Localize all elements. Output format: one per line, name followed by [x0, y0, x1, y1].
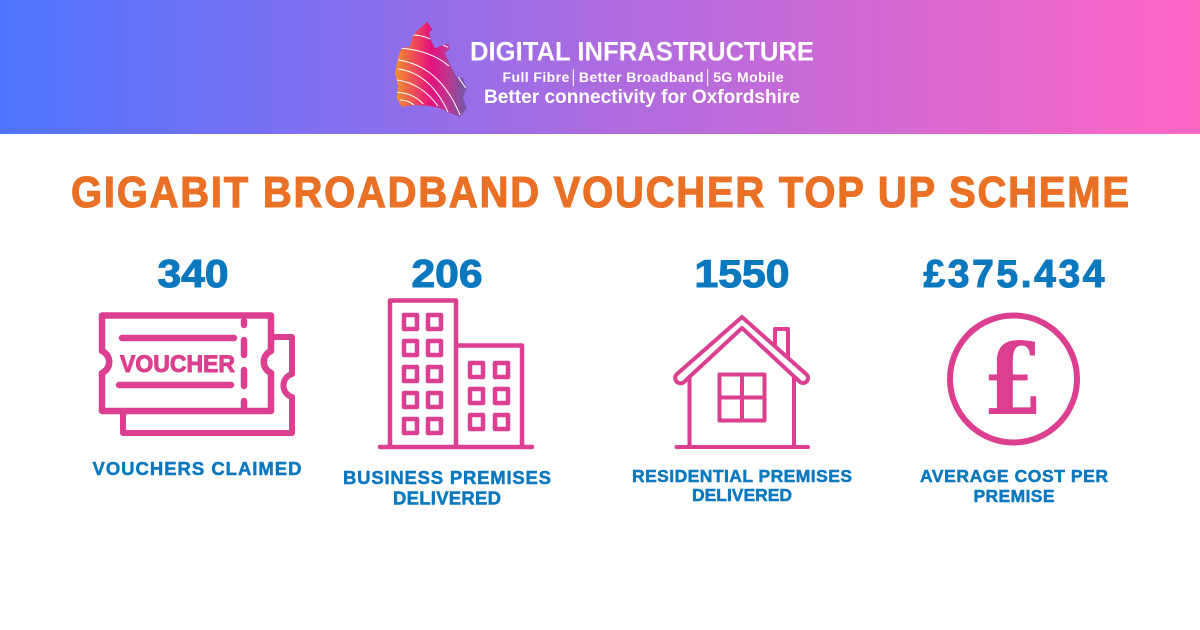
- header banner: [0, 0, 1200, 134]
- label: RESIDENTIAL PREMISES: [632, 466, 852, 486]
- icon: voucher tickets: [102, 316, 292, 433]
- stat: residential premises: DELIVERED: [692, 485, 792, 505]
- icon: office buildings: [380, 300, 532, 447]
- label: AVERAGE COST PER: [920, 466, 1108, 486]
- label: VOUCHERS CLAIMED: [92, 458, 302, 479]
- header subtitle: Full Fibre│Better Broadband│5G Mobile: [502, 69, 784, 87]
- number 1550: 1550: [694, 253, 790, 296]
- header title: DIGITAL INFRASTRUCTURE: [470, 36, 814, 66]
- number 340: 340: [158, 253, 228, 296]
- number £375.434: £375.434: [924, 253, 1105, 296]
- stat: business premises: [343, 253, 551, 508]
- stat: business premises: DELIVERED: [393, 488, 501, 508]
- icon: pound coin: [950, 316, 1077, 442]
- stat: average cost: PREMISE: [974, 486, 1054, 506]
- icon: pound coin: £: [983, 321, 1042, 437]
- icon: Oxfordshire map logo: [395, 22, 467, 117]
- icon: house: [675, 317, 808, 447]
- header tagline: Better connectivity for Oxfordshire: [484, 87, 800, 108]
- icon: voucher tickets: VOUCHER: [120, 351, 235, 378]
- number 206: 206: [412, 253, 482, 296]
- label: BUSINESS PREMISES: [343, 467, 551, 488]
- main title: GIGABIT BROADBAND VOUCHER TOP UP SCHEME: [71, 167, 1129, 216]
- stat: average cost: [920, 253, 1108, 506]
- stat: vouchers claimed: [92, 253, 302, 479]
- stat: residential premises: [632, 253, 852, 505]
